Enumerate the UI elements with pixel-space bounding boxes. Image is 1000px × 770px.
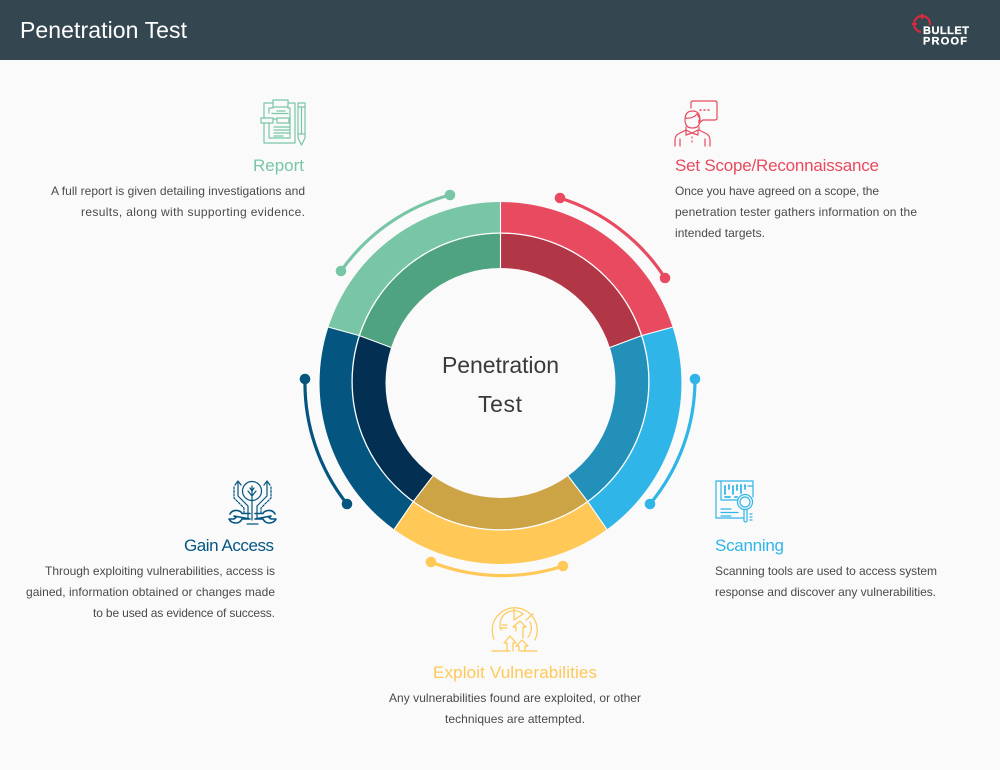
arc arrow: scanning — [645, 374, 700, 509]
panel: gain access — [26, 481, 276, 620]
heading: Set Scope/Reconnaissance — [675, 156, 879, 175]
icon: document with magnifying glass — [716, 481, 753, 522]
segment: exploit vulnerabilities — [394, 476, 607, 564]
header bar — [0, 0, 1000, 60]
segment: set scope — [500, 202, 673, 348]
segment: gain access — [320, 327, 433, 529]
description: penetration tester gathers information on the — [675, 205, 917, 219]
icon: clipboard with glasses and pen — [261, 100, 305, 145]
donut centre label: Test — [478, 391, 523, 417]
donut centre label — [442, 352, 559, 417]
donut centre label: Penetration — [442, 352, 559, 378]
icon: person with speech bubble — [675, 101, 717, 146]
description: Through exploiting vulnerabilities, access is — [45, 564, 275, 578]
segment: report — [328, 202, 500, 348]
arc arrow: exploit vulnerabilities — [426, 557, 568, 576]
logo: Bullet Proof: BULLET — [923, 25, 969, 37]
heading: Report — [253, 156, 304, 175]
panel: set scope / reconnaissance — [675, 101, 917, 240]
logo: Bullet Proof: PROOF — [923, 36, 967, 48]
description: intended targets. — [675, 226, 765, 240]
description: results, along with supporting evidence. — [81, 205, 305, 219]
heading: Exploit Vulnerabilities — [433, 663, 597, 682]
description: to be used as evidence of success. — [93, 606, 275, 620]
logo: Bullet Proof — [912, 14, 969, 48]
description — [51, 184, 305, 219]
description: techniques are attempted. — [445, 712, 585, 726]
segment: scanning — [568, 327, 681, 529]
description: Once you have agreed on a scope, the — [675, 184, 879, 198]
description — [675, 184, 917, 240]
arc arrow: gain access — [300, 374, 352, 509]
panel: exploit vulnerabilities — [389, 608, 641, 726]
donut chart — [320, 202, 681, 564]
description — [389, 691, 641, 726]
arc arrow: set scope — [555, 193, 670, 283]
page title: Penetration Test — [20, 17, 188, 43]
icon: wrenches with circuit arrows — [229, 481, 276, 524]
icon: radar with arrows — [492, 608, 537, 651]
description: gained, information obtained or changes made — [26, 585, 275, 599]
heading: Scanning — [715, 536, 784, 555]
heading: Gain Access — [184, 536, 274, 555]
panel: report — [51, 100, 305, 219]
panel: scanning — [715, 481, 937, 599]
description: A full report is given detailing investigations and — [51, 184, 305, 198]
description — [715, 564, 937, 599]
description: response and discover any vulnerabilities. — [715, 585, 936, 599]
arc arrow: report — [336, 190, 455, 276]
description: Scanning tools are used to access system — [715, 564, 937, 578]
description: Any vulnerabilities found are exploited, or other — [389, 691, 641, 705]
description — [26, 564, 275, 620]
